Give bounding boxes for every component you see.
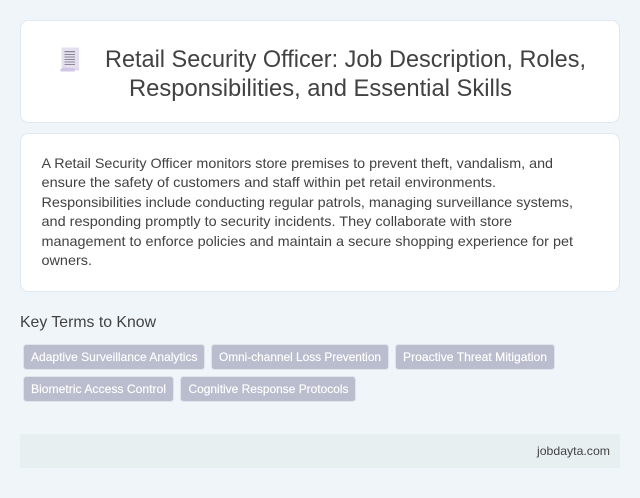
tags: key terms — [24, 344, 554, 402]
title: Retail Security Officer: Job Description, Roles, — [105, 46, 586, 73]
title — [105, 46, 586, 102]
tag: adaptive surveillance analytics: Adaptive Surveillance Analytics — [31, 350, 198, 364]
description text: and responding promptly to security incidents. They collaborate with store — [42, 213, 512, 229]
heading: key terms: Key Terms to Know — [20, 314, 156, 331]
panel: description card — [20, 134, 620, 292]
icon: paper receipt document — [60, 48, 79, 72]
tag: omni-channel loss prevention: Omni-channel Loss Prevention — [219, 350, 381, 364]
tag: proactive threat mitigation — [396, 344, 554, 370]
footer bar — [20, 434, 620, 468]
tag: adaptive surveillance analytics — [24, 344, 204, 370]
title: Responsibilities, and Essential Skills — [129, 75, 512, 102]
description text: owners. — [42, 252, 92, 268]
description text: ensure the safety of customers and staff within pet retail environments. — [42, 174, 496, 190]
tag: biometric access control: Biometric Access Control — [31, 382, 166, 396]
description text: A Retail Security Officer monitors store premises to prevent theft, vandalism, and — [42, 155, 553, 171]
footer source text: jobdayta.com — [536, 444, 610, 458]
tag: omni-channel loss prevention — [212, 344, 388, 370]
tag: cognitive response protocols: Cognitive Response Protocols — [188, 382, 348, 396]
tag: cognitive response protocols — [180, 376, 356, 402]
tag: biometric access control — [24, 376, 174, 402]
description text: Responsibilities include conducting regular patrols, managing surveillance systems, — [42, 194, 573, 210]
panel: title card — [20, 20, 620, 122]
tag: proactive threat mitigation: Proactive Threat Mitigation — [403, 350, 547, 364]
description text: management to enforce policies and maintain a secure shopping experience for pet — [42, 233, 573, 249]
description text — [42, 155, 573, 268]
